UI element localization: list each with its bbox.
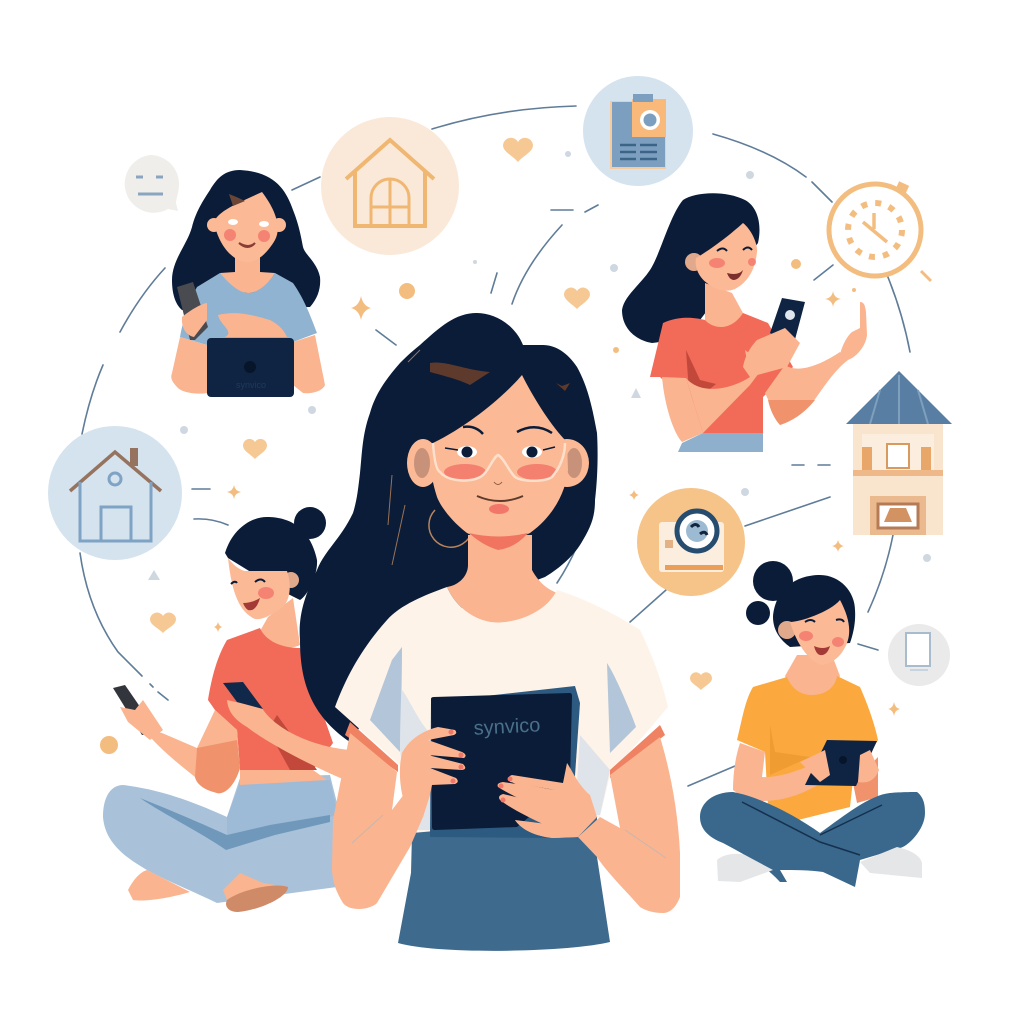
- icon: clock: [829, 181, 931, 281]
- person: top-left woman with laptop: synvico: [236, 380, 266, 390]
- person: left sitting woman with phones: [103, 507, 350, 912]
- icon: tablet outline: [888, 624, 950, 686]
- icon: document in blue circle: [583, 76, 693, 186]
- person: top-left woman with laptop: [171, 170, 325, 397]
- person: right sitting woman with tablet: [700, 561, 925, 887]
- person: top-right woman with phone: [622, 193, 867, 452]
- icon: chat face bubble: [125, 155, 179, 213]
- icon: camera in orange circle: [637, 488, 745, 596]
- person: central woman with tablet: [300, 313, 680, 951]
- person: central woman with tablet: synvico: [473, 714, 541, 740]
- icon: house in peach circle: [321, 117, 459, 255]
- decorative hearts and sparkles: [100, 138, 931, 754]
- icon: house in blue circle: [48, 426, 182, 560]
- icon: tall house: [846, 371, 952, 535]
